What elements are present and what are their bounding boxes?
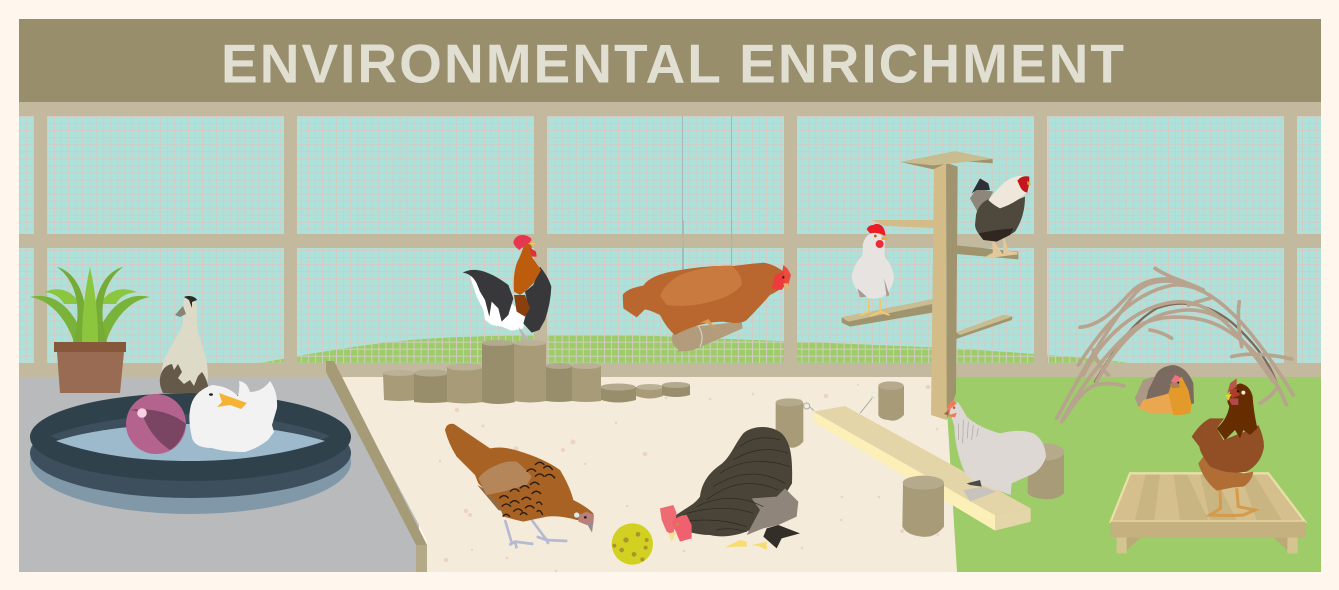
panel: wooden coop frame [19,102,1321,377]
red-brown hen on platform [1192,378,1264,516]
lavender hen [944,400,1046,502]
swing log and ropes [668,220,743,355]
plank see-saw [813,406,1031,531]
climbing tree, board, stumps and hens (local scale) [804,151,1064,537]
hen in nest [1135,365,1194,415]
stump behind see-saw [878,381,904,421]
dark feathered hen [660,427,800,550]
panel: grass area [945,377,1321,572]
paddling pool [30,393,351,514]
white hen on perch [852,224,894,316]
rooster on stump [463,235,551,342]
nest, hens and platform (local scale) [1057,268,1306,553]
hen on swing [623,263,791,335]
title: ENVIRONMENTAL ENRICHMENT [221,32,1124,94]
stepping stumps [383,340,690,404]
panel: sky and wire mesh behind the coop [19,102,1321,367]
stump in foreground [902,476,944,537]
panel: concrete floor [19,377,419,572]
rooster, hen on swing, hens, ball and stump (local scale) [445,220,803,565]
climbing post with perches [842,151,1018,420]
sandbox wooden edge [326,361,427,572]
see-saw tether [804,393,877,413]
stump on grass [1028,444,1064,499]
brown speckled hen [445,424,594,548]
panel: sand area [340,377,957,572]
yellow toy ball [612,523,653,565]
beach ball [126,394,186,454]
sand pebbles [439,384,939,572]
standing duck [160,296,209,393]
black and white rooster [970,176,1031,257]
stump behind dark hen [776,398,803,448]
white duck in pool [189,381,277,452]
twig arch shelter [1057,268,1293,422]
title banner [19,19,1321,102]
wooden platform [1111,473,1306,553]
potted plant [30,267,150,393]
